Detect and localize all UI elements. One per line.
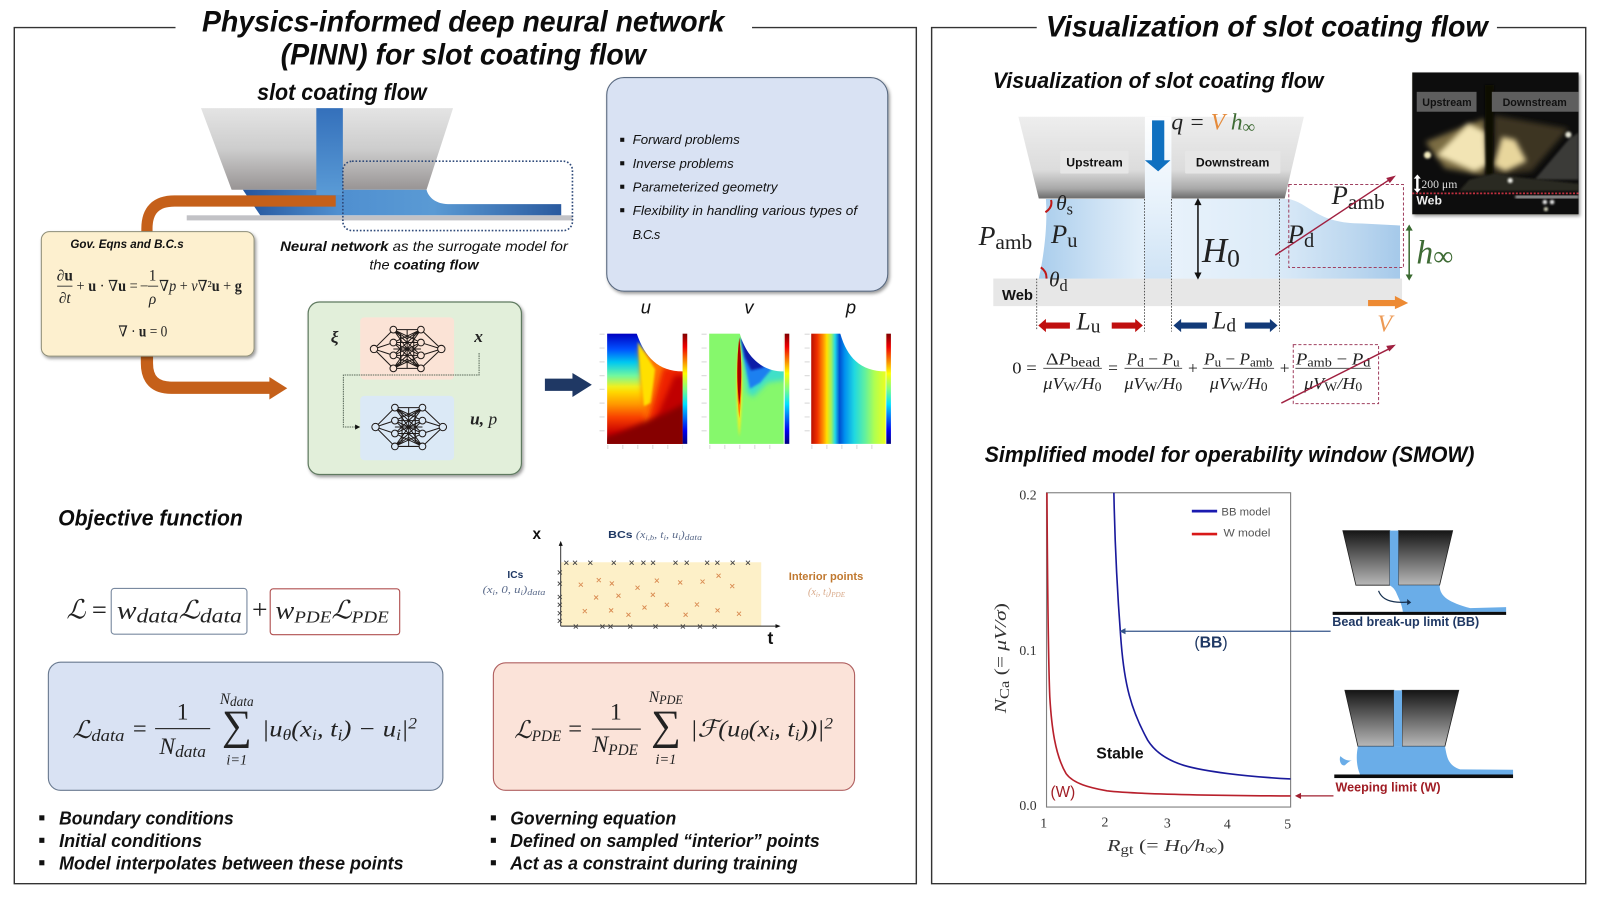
equation: PDE loss: i [795, 727, 800, 744]
arrow: equations into the flow [147, 201, 336, 233]
equation: pressure balance: amb [1250, 355, 1272, 369]
equation: total loss: PDE [293, 607, 332, 626]
label: ICs: ) [522, 585, 528, 596]
equation: pressure balance: bead [1071, 354, 1100, 369]
equation: pressure balance: P [1204, 349, 1214, 368]
equation: PDE loss: N [649, 689, 659, 706]
label: web: Web [1002, 288, 1033, 304]
equation: total loss [66, 588, 400, 635]
label: BCs: BCs (x [608, 530, 644, 541]
equation: momentum: ∂t [59, 290, 71, 307]
equation: total loss: data [137, 605, 179, 627]
label: ICs: , 0, u [495, 585, 521, 596]
arrow: BB limit [1119, 628, 1331, 634]
y ticks [1019, 487, 1037, 813]
label: ICs: data [527, 588, 545, 597]
equation: PDE loss: N [593, 732, 608, 758]
equation: PDE loss: ℒ [514, 717, 532, 744]
equation: data loss: i [338, 727, 342, 744]
equation: PDE loss: 2 [824, 716, 833, 733]
label: interior points: Interior points [789, 571, 863, 583]
equation: pressure balance: P [1162, 349, 1173, 368]
y ticks: 0.2 [1019, 487, 1037, 502]
symbols: s [1067, 199, 1073, 218]
axis labels: t [768, 628, 774, 648]
equation: PDE loss [514, 689, 833, 768]
label: interior points: ) [827, 587, 832, 598]
x axis label: R [1107, 836, 1118, 855]
arrow: network to results [545, 373, 592, 397]
bullets: data loss: Model interpolates between these points [59, 852, 404, 873]
symbols: θ [1056, 191, 1067, 215]
equation: PDE loss: PDE [607, 742, 639, 759]
equation: pressure balance: − [1221, 349, 1239, 368]
excluded term [1281, 345, 1396, 404]
equation: total loss: + [252, 593, 268, 624]
input labels: ξ [331, 328, 339, 347]
equation: data loss: data [91, 726, 125, 745]
equation: pressure balance: ΔP [1046, 349, 1069, 368]
bullets: data loss: Boundary conditions [59, 807, 234, 828]
slot fluid [1145, 117, 1171, 279]
heading: objective function: Objective function [58, 506, 243, 531]
heatmap: u field [602, 333, 886, 449]
bullets: PDE loss: Defined on sampled “interior” points [510, 830, 820, 851]
symbols: u [1067, 230, 1077, 252]
label: ICs: i [521, 589, 523, 597]
arrow: equations into the network [147, 355, 287, 399]
contact angles [1041, 200, 1051, 279]
bullets: data loss: Initial conditions [59, 830, 202, 851]
equation: PDE loss: PDE [531, 728, 562, 745]
bullets: data loss [39, 807, 404, 873]
input labels: x [473, 327, 483, 346]
equation: PDE loss: i [769, 727, 774, 744]
symbols: P [1288, 219, 1304, 249]
panel frame: right [932, 28, 1586, 884]
label: BCs: i [678, 534, 681, 542]
bullet list: Forward problems [633, 132, 740, 147]
symbols: θ [1049, 268, 1059, 292]
legend: W model [1223, 528, 1270, 540]
equation: data loss: data [230, 694, 254, 709]
dimension: H0: H [1202, 231, 1227, 270]
equation: total loss: data [200, 605, 242, 627]
equation: PDE loss: PDE [658, 693, 683, 707]
label: interior points: (x [808, 587, 816, 598]
equation: data loss: data [175, 742, 206, 761]
equation: pressure balance: + [1280, 358, 1290, 377]
equation: total loss: w [117, 595, 134, 624]
equation: total loss: ℒ [66, 594, 86, 624]
web [993, 279, 1402, 306]
label: interior points: PDE [830, 591, 846, 599]
equation: pressure balance: μV [1304, 374, 1323, 393]
photo: bead visualization [1412, 72, 1579, 214]
label: weeping: Weeping limit (W) [1336, 779, 1441, 794]
panel: visualization of slot coating flow [932, 11, 1586, 884]
equation: pressure balance: 0 [1095, 380, 1102, 394]
equation: data loss: i=1 [226, 752, 247, 768]
die labels: Downstream [1196, 155, 1269, 169]
caption: surrogate model: the coating flow [369, 257, 479, 273]
diagram: slot coating die and bead [187, 108, 572, 231]
equation: data loss: 1 [177, 699, 189, 725]
caption: surrogate model [280, 239, 569, 273]
arrow: web velocity [1368, 296, 1408, 338]
chart: operability window [991, 487, 1333, 857]
equation: total loss: w [276, 595, 293, 624]
upstream fluid [1039, 199, 1145, 279]
equation: PDE loss: |ℱ(u [690, 717, 735, 743]
panel: PDE loss [493, 663, 855, 790]
equation: data loss: i [312, 727, 317, 744]
flow rate label: q = V h [1171, 110, 1243, 136]
panel frame: left [14, 28, 916, 884]
arrow: W limit [1295, 793, 1333, 799]
equation: pressure balance: W [1064, 380, 1078, 394]
heading: SMOW: Simplified model for operability window (SMOW) [985, 442, 1474, 467]
x ticks: 5 [1284, 817, 1291, 832]
y axis label: Ca [997, 681, 1012, 699]
equation: pressure balance: P [1239, 349, 1250, 368]
slot die [1018, 117, 1304, 198]
field label: u: u [641, 296, 651, 317]
downstream fluid [1171, 199, 1400, 279]
x axis label: gt [1121, 842, 1134, 857]
equation: data loss: (x [291, 717, 313, 743]
equation: PDE loss: 1 [610, 699, 622, 725]
title: PINN: (PINN) for slot coating flow [281, 38, 648, 71]
x ticks [1040, 815, 1291, 832]
heading: governing equations: Gov. Eqns and B.C.s [70, 238, 184, 251]
photo: bead visualization: 200 μm [1421, 178, 1457, 191]
network: geometry to mapping [360, 317, 454, 380]
equation: momentum: ∂u [57, 268, 73, 285]
symbols: amb [1348, 190, 1385, 214]
y ticks: 0.1 [1019, 643, 1037, 658]
panel: data loss [48, 662, 443, 790]
label: ICs: (x [483, 585, 491, 596]
label: ICs: ICs [507, 570, 524, 581]
equation: PDE loss: , t [774, 717, 795, 743]
equation: pressure balance [1012, 345, 1396, 404]
equation: momentum: ρ [148, 291, 156, 308]
equation: pressure balance: 0 = [1012, 358, 1037, 377]
x ticks: 1 [1040, 816, 1047, 831]
equation: data loss: , t [317, 717, 338, 743]
dimension: Ld: L [1212, 306, 1226, 335]
network: flow fields [360, 396, 454, 460]
symbols: d [1304, 230, 1314, 252]
equation: momentum: ∇p + ν∇²u + g [159, 278, 242, 295]
equation: data loss: θ [283, 727, 292, 744]
equation: data loss: ) − u [340, 717, 396, 743]
bullet list [620, 132, 859, 242]
curve: W model [1047, 493, 1291, 796]
x ticks: 2 [1101, 815, 1108, 830]
equation: pressure balance: /H [1156, 374, 1176, 393]
equation: pressure balance: d [1137, 355, 1144, 369]
equation: pressure balance: μV [1124, 374, 1143, 393]
label: BCs: i [664, 534, 666, 542]
arrow: web velocity: V [1377, 311, 1395, 338]
label: interior points: i [816, 591, 818, 599]
caption: surrogate model: Neural network as the surrogate model for [280, 239, 569, 255]
equation: data loss: N [159, 734, 175, 760]
symbols [978, 180, 1385, 295]
region labels [1051, 634, 1228, 801]
label: interior points: , t [818, 587, 827, 598]
x ticks: 4 [1224, 817, 1231, 832]
curve: BB model [1114, 493, 1291, 779]
equation: data loss: ∑ [222, 703, 252, 749]
label: BCs: , u [666, 530, 678, 541]
label: ICs: i [493, 589, 495, 597]
equation: total loss: = [92, 594, 107, 624]
equation: pressure balance: = [1108, 358, 1118, 377]
dimension: H0 [1194, 198, 1240, 280]
dimension: Ld [1173, 306, 1278, 337]
dimension: Lu: L [1077, 307, 1091, 336]
x ticks: 3 [1164, 816, 1171, 831]
diagram: slot die and bead [978, 110, 1454, 338]
illustration: bead break-up [1332, 531, 1506, 629]
equation: pressure balance: W [1144, 380, 1158, 394]
panel: neural networks [308, 302, 521, 474]
bullet list: Inverse problems [633, 156, 734, 171]
equation: total loss: ℒ [331, 595, 352, 624]
equation: pressure balance: 0 [1355, 380, 1362, 394]
symbols: P [1332, 180, 1348, 210]
label: interior points: i [826, 591, 828, 599]
bullets: PDE loss: Governing equation [510, 807, 676, 828]
equation: pressure balance: μV [1210, 374, 1229, 393]
heading: slot coating flow: slot coating flow [257, 79, 428, 105]
label: BCs: , t [654, 530, 665, 541]
label: ICs [483, 570, 545, 597]
equation: pressure balance: W [1230, 380, 1244, 394]
label: BCs: ) [679, 530, 685, 541]
label: BCs: data [685, 533, 702, 542]
dimension: Ld: d [1226, 316, 1236, 337]
region labels: Stable [1096, 746, 1144, 763]
dimension guides [1037, 199, 1280, 332]
equation: pressure balance: /H [1242, 374, 1262, 393]
symbols: P [1051, 219, 1067, 249]
equation: continuity: ∇ · u = 0 [118, 324, 168, 341]
equation: pressure balance: − [1144, 349, 1162, 368]
label: bead break-up: Bead break-up limit (BB) [1332, 614, 1479, 629]
photo: bead visualization: Upstream [1422, 97, 1472, 109]
equation: pressure balance: 0 [1175, 380, 1182, 394]
equation: PDE loss: θ [740, 727, 749, 744]
equation: pressure balance: /H [1075, 374, 1096, 393]
equation: pressure balance: u [1173, 355, 1180, 369]
illustration: weeping [1334, 690, 1513, 794]
region labels: (W) [1051, 784, 1075, 801]
y ticks: 0.0 [1019, 798, 1037, 813]
dimension: Lu: u [1091, 317, 1101, 338]
equation: data loss: N [220, 691, 230, 708]
equation: pressure balance: P [1296, 349, 1306, 368]
equation: total loss: ℒ [179, 595, 201, 624]
legend [1192, 506, 1270, 540]
equation: pressure balance: P [1352, 349, 1362, 368]
equation: pressure balance: − [1332, 349, 1352, 368]
interior points [579, 574, 741, 617]
symbols: d [1059, 276, 1068, 295]
field label: p: p [845, 296, 856, 317]
equation: pressure balance: P [1127, 349, 1137, 368]
title: PINN [202, 6, 726, 71]
bullet list: Flexibility in handling various types of [633, 203, 859, 218]
bullets: PDE loss [491, 807, 820, 873]
y axis label: N [991, 702, 1010, 713]
input labels [331, 327, 497, 428]
equation: total loss: PDE [351, 607, 389, 626]
equation: data loss: = [133, 716, 147, 743]
equation: momentum: − [140, 278, 148, 295]
x axis label: H [1164, 836, 1177, 855]
equation: data loss: ℒ [72, 717, 90, 744]
equation: momentum [57, 268, 242, 308]
y axis label: μV/σ) [991, 604, 1010, 651]
equation: pressure balance: W [1324, 380, 1338, 394]
label: BCs: i,b [645, 534, 655, 542]
field label: v: v [744, 296, 755, 317]
data points [558, 561, 750, 629]
equation: PDE loss: = [568, 716, 582, 743]
label: interior points [789, 571, 863, 599]
equation: data loss: i [396, 727, 401, 744]
heatmap: v field [709, 333, 789, 444]
input labels: u, p [470, 409, 497, 428]
panel: governing equations [41, 232, 254, 356]
x axis label: 0 [1180, 842, 1189, 857]
equation: pressure balance: + [1188, 358, 1198, 377]
photo: bead visualization: Downstream [1503, 97, 1567, 109]
equation: data loss: | [401, 717, 408, 743]
excluded downstream region [1275, 176, 1403, 268]
equation: momentum: 1 [149, 268, 156, 285]
panel: PINN for slot coating flow [14, 6, 916, 884]
equation: PDE loss: ))| [797, 717, 824, 743]
equation: data loss [72, 691, 417, 768]
dimension: H0: 0 [1227, 243, 1240, 272]
dimension: Lu [1038, 307, 1143, 338]
connector between networks [343, 353, 479, 430]
equation: pressure balance: amb [1307, 355, 1332, 369]
x axis label: (= [1134, 836, 1164, 855]
equation: pressure balance: /H [1336, 374, 1356, 393]
arrow: feed [1145, 120, 1170, 171]
dimension: film thickness [1406, 224, 1454, 281]
equation: data loss: |u [262, 717, 280, 743]
title: PINN: Physics-informed deep neural network [202, 6, 726, 39]
equation: PDE loss: ∑ [651, 703, 681, 749]
dimension: film thickness: ∞ [1433, 241, 1454, 272]
flow rate label: ∞ [1243, 118, 1255, 137]
equation: PDE loss: (x [749, 717, 770, 743]
equation: PDE loss: i=1 [656, 752, 676, 768]
axis labels [532, 526, 774, 648]
bullet list: Parameterized geometry [633, 179, 779, 194]
legend: BB model [1221, 506, 1270, 518]
bullet list: B.C.s [633, 227, 661, 242]
equation: pressure balance: μV [1043, 374, 1062, 393]
x axis label: ) [1217, 836, 1225, 855]
equation: data loss: 2 [408, 716, 417, 733]
equation: pressure balance: 0 [1261, 380, 1268, 394]
equation: momentum: + u · ∇u = [77, 278, 138, 295]
heatmap: p field [811, 333, 891, 444]
dimension: film thickness: h [1416, 234, 1433, 271]
bullets: PDE loss: Act as a constraint during training [509, 852, 798, 873]
photo: bead visualization: Web [1416, 194, 1442, 208]
x axis label: ∞ [1205, 842, 1217, 857]
equation: pressure balance: d [1363, 355, 1371, 369]
chart: collocation points [483, 526, 863, 648]
symbols: amb [995, 230, 1032, 254]
symbols: P [979, 220, 995, 251]
x axis label: /h [1187, 836, 1205, 855]
region labels: (BB) [1194, 634, 1228, 651]
heading: visualization: Visualization of slot coating flow [993, 68, 1325, 93]
die labels [1060, 151, 1280, 173]
y axis label: (= [991, 651, 1010, 681]
panel: capabilities list [607, 78, 888, 291]
equation: pressure balance: u [1215, 355, 1222, 369]
axis labels: x [532, 526, 541, 543]
die labels: Upstream [1066, 155, 1123, 169]
title: visualization: Visualization of slot coating flow [1046, 11, 1490, 44]
